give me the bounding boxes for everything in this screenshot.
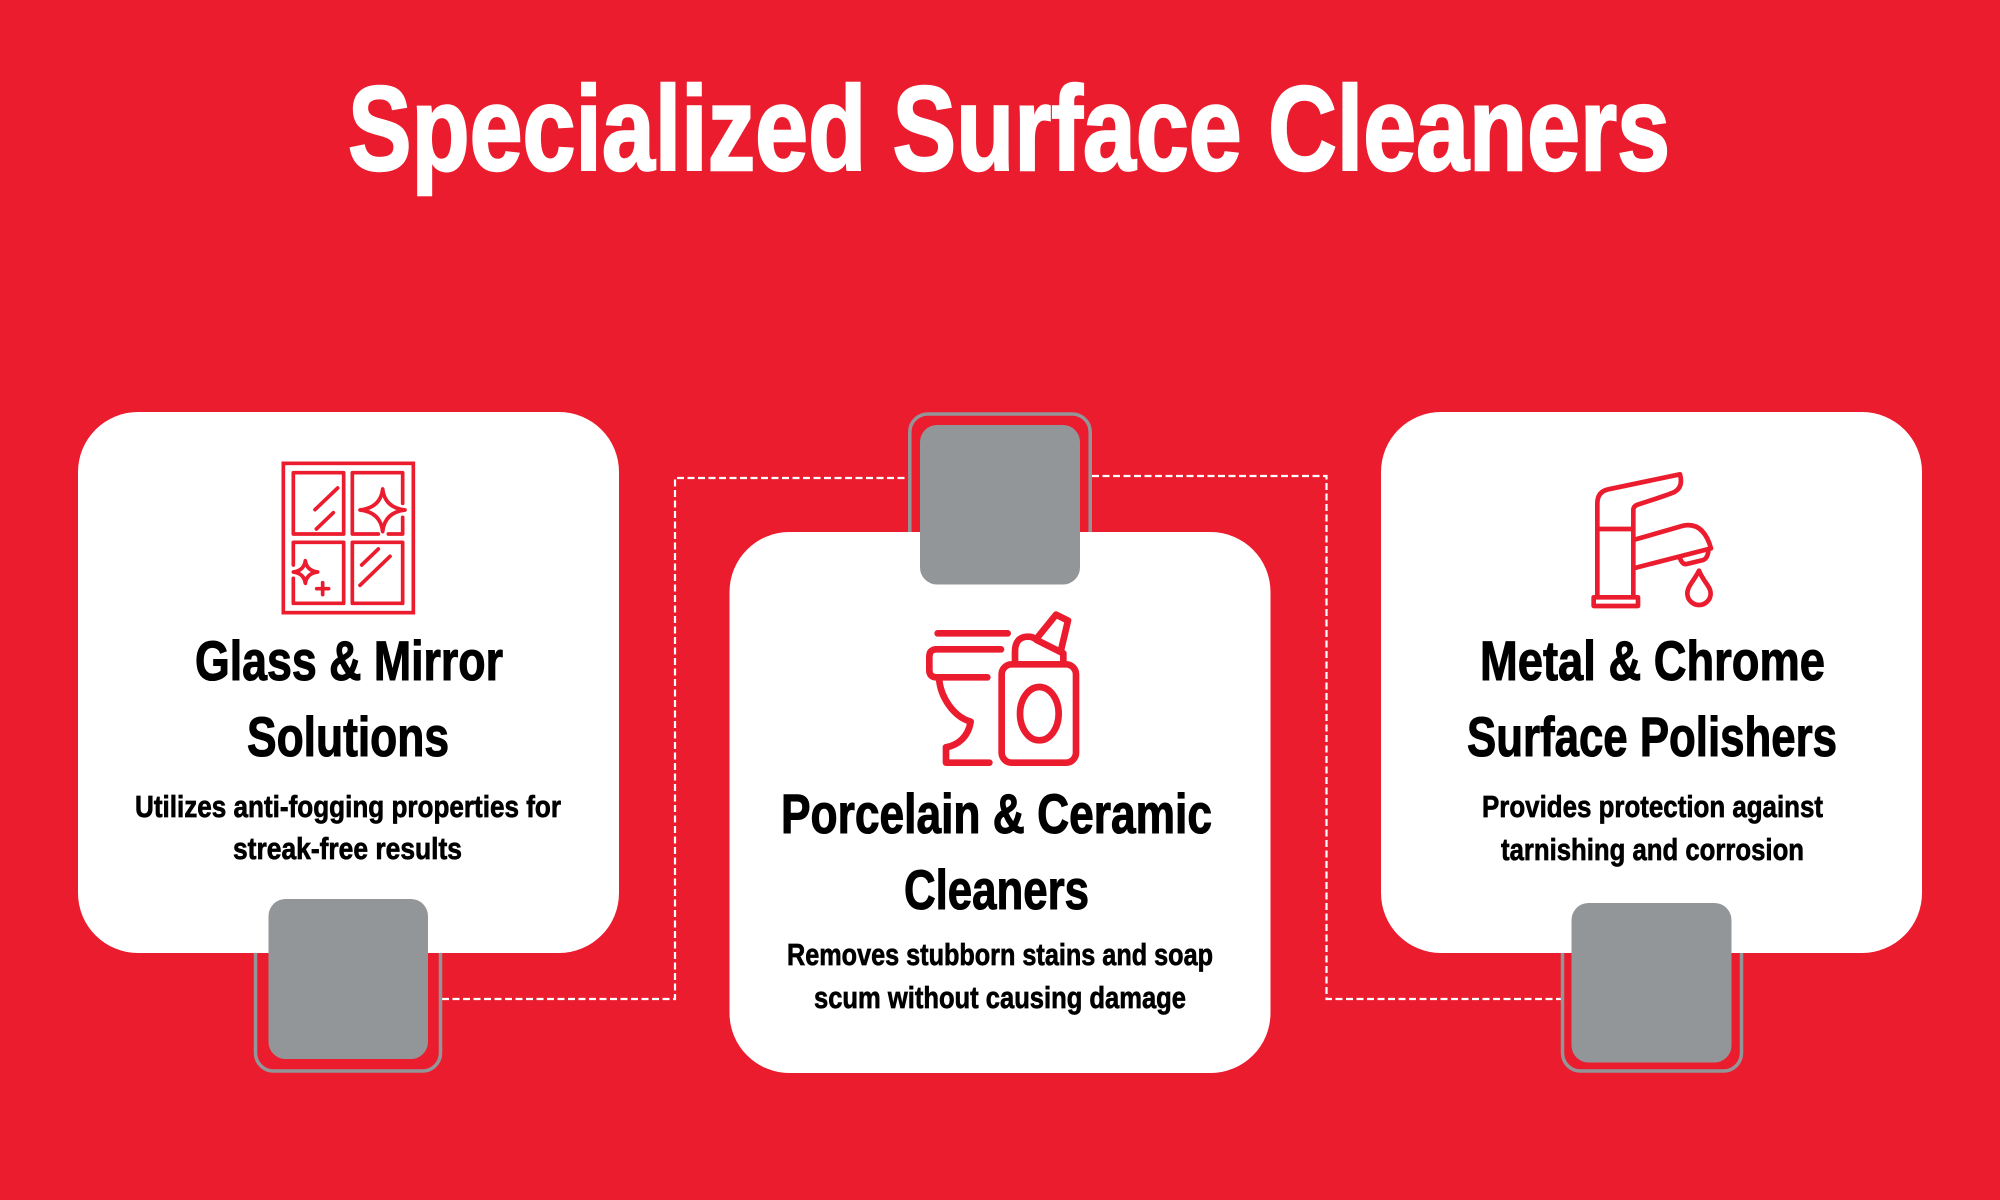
description (787, 937, 1213, 1015)
tab outline (1562, 940, 1742, 1071)
dashed connector: left card to middle card (442, 478, 908, 999)
description: Utilizes anti-fogging properties for (135, 789, 561, 824)
description: tarnishing and corrosion (1501, 832, 1804, 867)
heading (195, 629, 503, 768)
description (1482, 789, 1823, 867)
tab outline (910, 414, 1090, 545)
icon: toilet and cleaner bottle (929, 615, 1076, 763)
grey square (268, 899, 428, 1059)
description: scum without causing damage (814, 980, 1186, 1015)
heading: Metal & Chrome (1480, 629, 1825, 692)
icon: window with sparkles (283, 463, 413, 613)
card background (730, 532, 1270, 1073)
panel: porcelain and ceramic (730, 414, 1270, 1073)
heading: Cleaners (904, 858, 1089, 921)
panel: glass and mirror (78, 412, 619, 1071)
grey square (920, 425, 1080, 584)
icon: faucet with drop (1594, 474, 1711, 606)
heading (1467, 629, 1837, 768)
grey square (1572, 903, 1732, 1062)
dashed connector: middle card to right card (1092, 476, 1561, 999)
description: Removes stubborn stains and soap (787, 937, 1213, 972)
panel: metal and chrome (1381, 412, 1922, 1071)
description: streak-free results (233, 831, 462, 866)
heading (781, 782, 1212, 921)
title: Specialized Surface Cleaners (348, 62, 1670, 196)
heading: Porcelain & Ceramic (781, 782, 1212, 845)
tab outline (256, 940, 440, 1071)
heading: Solutions (247, 705, 449, 768)
description (135, 789, 561, 866)
heading: Glass & Mirror (195, 629, 503, 692)
description: Provides protection against (1482, 789, 1823, 824)
card background (78, 412, 619, 953)
heading: Surface Polishers (1467, 705, 1837, 768)
card background (1381, 412, 1922, 953)
